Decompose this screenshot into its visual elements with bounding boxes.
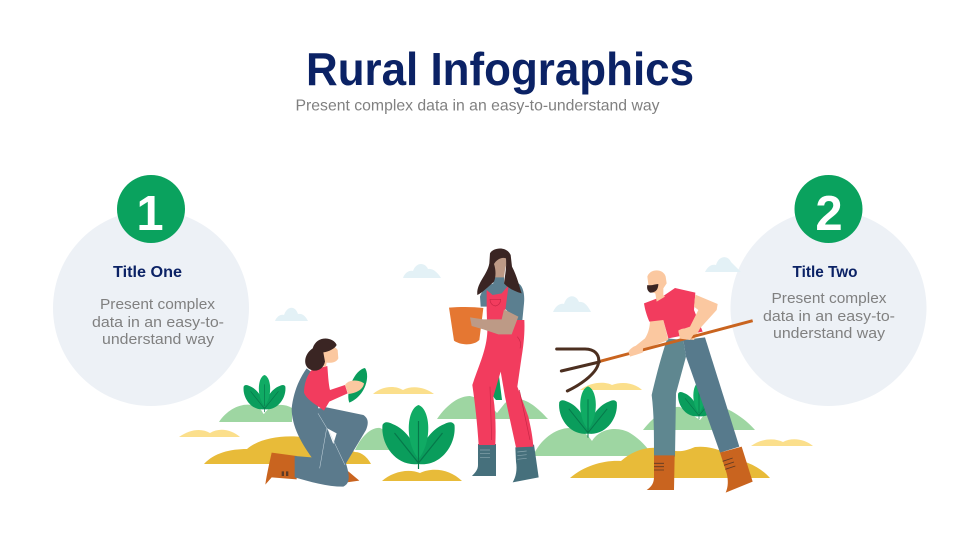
- figure: woman with pot: [449, 249, 539, 482]
- figure: man with pitchfork: [557, 270, 753, 493]
- overalls: [472, 285, 533, 447]
- number badge 1: [117, 175, 185, 243]
- number badge 2: [794, 175, 862, 243]
- hair: [477, 249, 522, 295]
- number badge 1: 1: [136, 187, 164, 241]
- legs: [652, 338, 686, 457]
- pot: [449, 307, 483, 344]
- text block: title two: understand way: [773, 325, 886, 342]
- head: [493, 255, 507, 277]
- plants: [244, 368, 720, 469]
- subtitle: Present complex data in an easy-to-understand way: [296, 98, 660, 114]
- beard: [647, 284, 658, 293]
- text block: title one: Present complex: [100, 296, 216, 313]
- hand: [345, 381, 364, 394]
- text block: title two: Present complex: [772, 290, 887, 307]
- title: Rural Infographics: [306, 43, 694, 95]
- text block: title two: data in an easy-to-: [763, 308, 895, 325]
- far foot: [347, 470, 359, 482]
- sweater: [304, 366, 348, 411]
- boots: [472, 444, 496, 476]
- near arm: [678, 295, 718, 340]
- text block: title two: [763, 290, 895, 342]
- arms: [470, 309, 518, 334]
- text block: title one: [92, 296, 224, 348]
- boot: [265, 453, 297, 485]
- figure: kneeling woman: [265, 339, 368, 487]
- hands: [628, 345, 643, 357]
- held leaf: [348, 368, 367, 403]
- number badge 2: 2: [815, 187, 843, 241]
- pitchfork handle: [600, 321, 753, 361]
- shirt: [644, 288, 703, 338]
- panel: title one: [53, 175, 249, 406]
- text block: title one: data in an easy-to-: [92, 314, 224, 331]
- boots: [647, 455, 675, 490]
- shirt: [480, 273, 524, 327]
- clouds: [275, 257, 741, 321]
- heading: title one: Title One: [113, 264, 182, 281]
- far arm: [628, 320, 668, 355]
- head: [317, 346, 338, 367]
- pitchfork tines: [557, 349, 599, 391]
- text block: title one: understand way: [102, 331, 215, 348]
- heading: title two: Title Two: [792, 264, 858, 281]
- head: [647, 270, 667, 302]
- panel: title two: [730, 175, 926, 406]
- overalls: [292, 368, 368, 487]
- background mounds: [179, 383, 813, 481]
